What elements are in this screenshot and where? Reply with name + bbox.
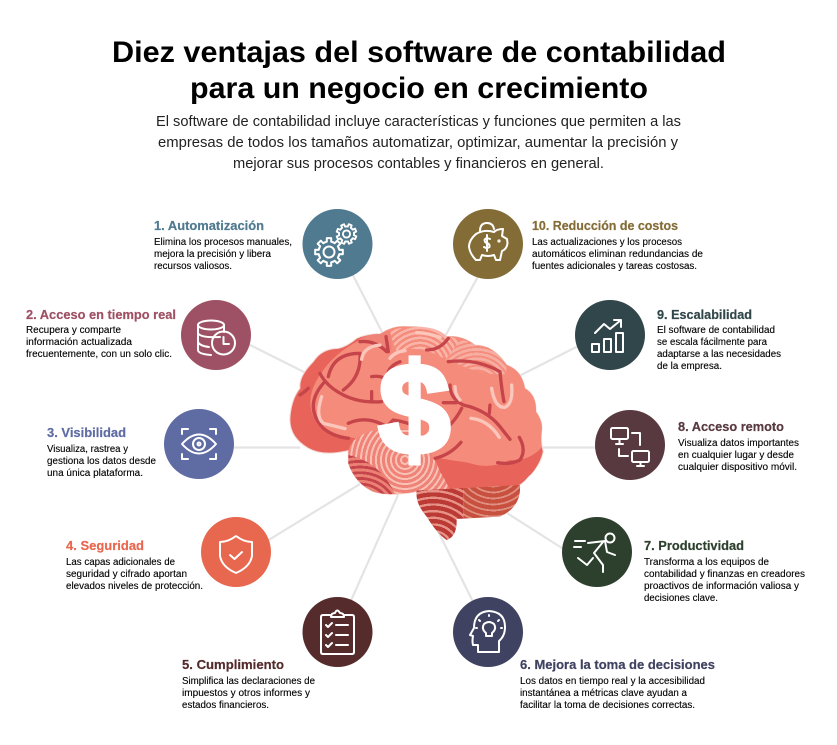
item 9: escalabilidad: El software de contabilidad (657, 325, 775, 336)
item 1: automatización (154, 209, 372, 279)
item 8: acceso remoto: en cualquier lugar y desde (678, 450, 794, 461)
item 2: acceso en tiempo real: frecuentemente, con un solo clic. (26, 349, 172, 360)
item 7: productividad: contabilidad y finanzas en creadores (644, 569, 805, 580)
item 4: seguridad: elevados niveles de protección. (66, 581, 203, 592)
item 2: acceso en tiempo real (26, 300, 251, 370)
temporal lobe stripes (348, 428, 450, 494)
icon: clipboard checklist (321, 610, 354, 654)
top lobe stripes (358, 327, 507, 374)
item 2: acceso en tiempo real: Recupera y comparte (26, 325, 121, 336)
item 10: reducción de costos: Las actualizaciones y los procesos (532, 237, 682, 248)
item 5: cumplimiento: 5. Cumplimiento (182, 657, 284, 672)
item 8: acceso remoto: Visualiza datos importantes (678, 438, 799, 449)
item 4: seguridad: 4. Seguridad (66, 538, 144, 553)
item 7: productividad: Transforma a los equipos de (644, 557, 769, 568)
icon: eye in frame (182, 429, 216, 459)
brain illustration (290, 326, 543, 543)
cerebellum (416, 485, 520, 540)
item 3: visibilidad: Visualiza, rastrea y (47, 444, 128, 455)
item 5: cumplimiento: impuestos y otros informes y (182, 688, 310, 699)
item 3: visibilidad: 3. Visibilidad (47, 425, 126, 440)
item 8: acceso remoto (595, 410, 799, 480)
item 3: visibilidad: gestiona los datos desde (47, 456, 156, 467)
brain outer lobe (290, 326, 543, 494)
intro text: El software de contabilidad incluye características y funciones que permiten a las (156, 114, 681, 130)
item 6: mejora la toma de decisiones (453, 597, 715, 711)
icon: running person (574, 534, 615, 572)
item 1: automatización: 1. Automatización (154, 218, 264, 233)
icon: shield check (220, 536, 252, 573)
title: Diez ventajas del software de contabilidad (112, 36, 726, 69)
item 4: seguridad (66, 517, 271, 592)
item 8: acceso remoto: 8. Acceso remoto (678, 419, 784, 434)
item 9: escalabilidad: de la empresa. (657, 361, 722, 372)
brain highlights (319, 397, 345, 429)
item 6: mejora la toma de decisiones: instantánea a métricas clave ayudan a (520, 688, 687, 699)
item 7: productividad: proactivos de información valiosa y (644, 581, 799, 592)
icon: growth chart (592, 320, 623, 352)
item 7: productividad: 7. Productividad (644, 538, 744, 553)
item 8: acceso remoto: cualquier dispositivo móvil. (678, 462, 797, 473)
item 6: mejora la toma de decisiones: 6. Mejora la toma de decisiones (520, 657, 715, 672)
item 6: mejora la toma de decisiones: facilitar la toma de decisiones correctas. (520, 700, 695, 711)
item 10: reducción de costos (453, 209, 703, 279)
item 5: cumplimiento: Simplifica las declaraciones de (182, 676, 315, 687)
item 7: productividad (562, 517, 805, 604)
icon: connected monitors (611, 428, 649, 466)
connector lines (199, 244, 630, 632)
item 3: visibilidad (47, 409, 234, 479)
item 4: seguridad: Las capas adicionales de (66, 557, 175, 568)
title: para un negocio en crecimiento (190, 72, 648, 105)
item 1: automatización: mejora la precisión y libera (154, 249, 271, 260)
item 9: escalabilidad: se escala fácilmente para (657, 337, 767, 348)
icon: gears (315, 224, 357, 266)
dollar sign: $ (379, 338, 450, 481)
item 5: cumplimiento (182, 597, 372, 711)
item 1: automatización: recursos valiosos. (154, 261, 232, 272)
icon: database clock (198, 320, 235, 355)
lower band (437, 448, 542, 488)
item 6: mejora la toma de decisiones: Los datos en tiempo real y la accesibilidad (520, 676, 705, 687)
icon: head with lightbulb (470, 611, 505, 652)
item 10: reducción de costos: 10. Reducción de costos (532, 218, 678, 233)
item 9: escalabilidad (575, 300, 781, 372)
item 7: productividad: decisiones clave. (644, 593, 718, 604)
item 4: seguridad: seguridad y cifrado aportan (66, 569, 187, 580)
title (112, 36, 726, 105)
item 10: reducción de costos: fuentes adicionales y tareas costosas. (532, 261, 697, 272)
item 2: acceso en tiempo real: 2. Acceso en tiempo real (26, 307, 176, 322)
item 9: escalabilidad: adaptarse a las necesidades (657, 349, 781, 360)
intro text (156, 114, 681, 172)
item 1: automatización: Elimina los procesos manuales, (154, 237, 292, 248)
item 9: escalabilidad: 9. Escalabilidad (657, 307, 752, 322)
item 10: reducción de costos: automáticos eliminan redundancias de (532, 249, 703, 260)
item 3: visibilidad: una única plataforma. (47, 468, 143, 479)
intro text: empresas de todos los tamaños automatizar, optimizar, aumentar la precisión y (158, 135, 679, 151)
intro text: mejorar sus procesos contables y financieros en general. (233, 156, 604, 172)
item 2: acceso en tiempo real: información actualizada (26, 337, 132, 348)
brain main lobe (310, 326, 542, 466)
item 5: cumplimiento: estados financieros. (182, 700, 269, 711)
brain sulci (300, 333, 523, 463)
icon: piggy bank (469, 223, 508, 260)
